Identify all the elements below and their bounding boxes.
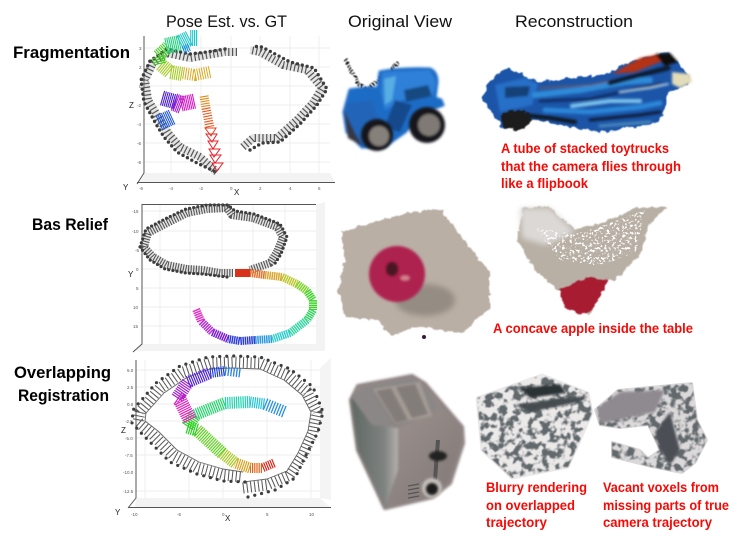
heading: Pose Est. vs. GT: Pose Est. vs. GT xyxy=(166,12,287,31)
axis labels: X xyxy=(234,188,240,197)
axis labels: 0 xyxy=(139,84,142,89)
axis labels: -5 xyxy=(135,248,139,253)
caption: vacant voxels from missing parts: missing parts of true xyxy=(603,498,729,513)
estimated pose colored segments xyxy=(158,38,210,128)
image: blurry toaster reconstruction xyxy=(477,375,592,478)
axis labels: -10.0 xyxy=(123,470,134,475)
caption: concave apple inside the table: A concave apple inside the table xyxy=(493,321,693,336)
axis labels: -10 xyxy=(132,229,139,234)
axis labels: 0 xyxy=(136,267,139,272)
estimated pose rainbow bands xyxy=(177,371,285,468)
chart: bas relief pose trajectories xyxy=(128,202,325,352)
axis labels: -6 xyxy=(139,186,143,191)
axis labels: 2.5 xyxy=(127,385,134,390)
caption: blurry rendering on overlapped trajectory: trajectory xyxy=(486,515,547,530)
axis labels: -2.5 xyxy=(125,419,133,424)
axis labels: Y xyxy=(128,270,134,279)
axis labels: 4 xyxy=(289,186,292,191)
gray ground-truth loop xyxy=(140,205,287,277)
axis labels: Z xyxy=(129,101,134,110)
axis labels: -5.0 xyxy=(125,436,133,441)
axis labels: -2 xyxy=(137,103,141,108)
caption: tube of stacked toytrucks: that the camera flies through xyxy=(501,159,681,174)
axis labels: 0 xyxy=(230,186,233,191)
row label: Overlapping Registration: Registration xyxy=(18,386,109,405)
row label: Overlapping Registration: Overlapping xyxy=(14,363,111,382)
caption: vacant voxels from missing parts: camera trajectory xyxy=(603,515,712,530)
axis labels: 15 xyxy=(133,324,139,329)
axis labels: -2 xyxy=(199,186,203,191)
axis labels: -12.5 xyxy=(123,489,134,494)
axis labels: -4 xyxy=(169,186,173,191)
axis labels: 0 xyxy=(222,512,225,517)
caption: blurry rendering on overlapped trajectory xyxy=(486,480,587,530)
heading: Reconstruction: Reconstruction xyxy=(515,12,633,31)
caption: vacant voxels from missing parts: Vacant voxels from xyxy=(603,480,719,495)
axis labels: 10 xyxy=(133,305,139,310)
axis labels: 6 xyxy=(318,186,321,191)
axis labels: -6 xyxy=(137,141,141,146)
image: concave apple reconstruction xyxy=(517,207,668,315)
image: toaster original view xyxy=(351,376,463,508)
axis labels: X xyxy=(225,514,231,523)
caption: blurry rendering on overlapped trajectory: Blurry rendering xyxy=(486,480,587,495)
chart: fragmentation pose trajectories xyxy=(123,36,335,197)
axis labels: 2 xyxy=(259,186,262,191)
row label: Fragmentation: Fragmentation xyxy=(13,43,130,62)
row label: Overlapping Registration xyxy=(14,363,111,405)
axis labels: 2 xyxy=(139,65,142,70)
gray ground-truth path xyxy=(132,356,323,497)
axis labels: Y xyxy=(123,183,129,192)
axis labels xyxy=(123,46,321,197)
gray ground-truth path xyxy=(141,46,327,172)
axis labels: -8 xyxy=(137,160,141,165)
axis labels: 3 xyxy=(139,46,142,51)
axis labels: 5 xyxy=(136,286,139,291)
image: apple on table original view xyxy=(338,210,490,339)
image: vacant voxels toaster reconstruction xyxy=(595,383,707,473)
axis labels: 0.0 xyxy=(127,402,134,407)
image: blue toy truck original view xyxy=(344,60,445,151)
axis labels: -10 xyxy=(131,512,138,517)
caption: blurry rendering on overlapped trajectory: on overlapped xyxy=(486,498,575,513)
axis labels xyxy=(115,368,315,523)
axis labels: 10 xyxy=(309,512,315,517)
caption: tube of stacked toytrucks: A tube of stacked toytrucks xyxy=(501,141,669,156)
axis labels: -4 xyxy=(137,122,141,127)
image: toy truck tube reconstruction xyxy=(482,53,692,132)
axis labels: Z xyxy=(121,426,126,435)
estimated pose rainbow band xyxy=(196,273,313,341)
axis labels: 5.0 xyxy=(127,368,134,373)
axis labels: -7.5 xyxy=(125,453,133,458)
red camera triangles xyxy=(205,128,223,171)
row label: Bas Relief: Bas Relief xyxy=(32,215,108,234)
axis labels: 5 xyxy=(266,512,269,517)
heading: Original View: Original View xyxy=(348,12,453,31)
axis labels: Y xyxy=(115,508,121,517)
axis labels: -5 xyxy=(177,512,181,517)
chart: overlapping registration pose trajectories xyxy=(115,356,331,523)
axis labels xyxy=(128,209,139,329)
caption: vacant voxels from missing parts xyxy=(603,480,729,530)
axis labels: -15 xyxy=(132,209,139,214)
caption: tube of stacked toytrucks xyxy=(501,141,681,191)
caption: tube of stacked toytrucks: like a flipbook xyxy=(501,176,588,191)
